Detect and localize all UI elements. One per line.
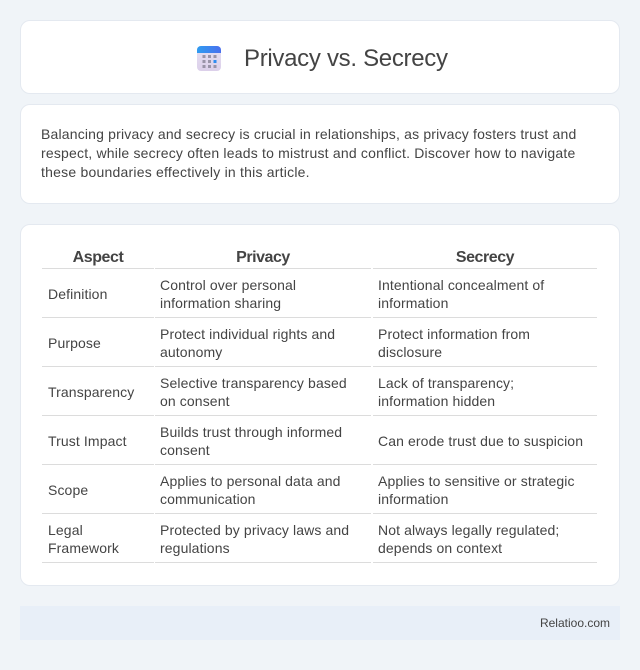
comparison table: on consent	[160, 393, 230, 409]
header: Aspect: Aspect	[73, 249, 123, 266]
footer text: Relatioo.com	[540, 616, 610, 630]
comparison table: Applies to sensitive or strategic	[378, 473, 575, 489]
title panel	[20, 20, 620, 94]
comparison table: disclosure	[378, 344, 442, 360]
intro panel	[20, 104, 620, 204]
icon: calendar	[197, 46, 221, 71]
intro text	[41, 126, 576, 180]
comparison table: regulations	[160, 540, 230, 556]
row: Scope	[48, 473, 575, 507]
table panel	[20, 224, 620, 586]
comparison table: Intentional concealment of	[378, 277, 544, 293]
comparison table: Lack of transparency;	[378, 375, 514, 391]
comparison table: Not always legally regulated;	[378, 522, 559, 538]
comparison table: Scope	[48, 482, 88, 498]
comparison table: Control over personal	[160, 277, 296, 293]
comparison table: autonomy	[160, 344, 222, 360]
comparison table: information sharing	[160, 295, 281, 311]
row: Transparency	[48, 375, 514, 409]
comparison table: Builds trust through informed	[160, 424, 342, 440]
header: Secrecy: Secrecy	[456, 249, 514, 266]
comparison table: information hidden	[378, 393, 495, 409]
comparison table: Legal	[48, 522, 83, 538]
comparison table: Can erode trust due to suspicion	[378, 433, 583, 449]
header: Privacy: Privacy	[236, 249, 290, 266]
intro text: respect, while secrecy often leads to mistrust and conflict. Discover how to navigate	[41, 145, 575, 161]
row: Trust Impact	[48, 424, 583, 458]
footer bar	[20, 606, 620, 640]
row: Purpose	[48, 326, 530, 360]
row: Definition	[48, 277, 544, 311]
comparison table: Protected by privacy laws and	[160, 522, 349, 538]
row: Legal Framework	[48, 522, 559, 556]
comparison table: information	[378, 491, 448, 507]
intro text: Balancing privacy and secrecy is crucial in relationships, as privacy fosters trust and	[41, 126, 576, 142]
title text: Privacy vs. Secrecy	[244, 45, 448, 72]
comparison table: Protect information from	[378, 326, 530, 342]
comparison table: Purpose	[48, 335, 101, 351]
comparison table: Framework	[48, 540, 119, 556]
comparison table: communication	[160, 491, 256, 507]
comparison table: information	[378, 295, 448, 311]
comparison table: Definition	[48, 286, 107, 302]
comparison table: Transparency	[48, 384, 134, 400]
intro text: these boundaries effectively in this article.	[41, 164, 310, 180]
comparison table: Trust Impact	[48, 433, 127, 449]
comparison table: depends on context	[378, 540, 502, 556]
comparison table: consent	[160, 442, 210, 458]
comparison table: Selective transparency based	[160, 375, 347, 391]
comparison table: Protect individual rights and	[160, 326, 335, 342]
comparison table: Applies to personal data and	[160, 473, 341, 489]
